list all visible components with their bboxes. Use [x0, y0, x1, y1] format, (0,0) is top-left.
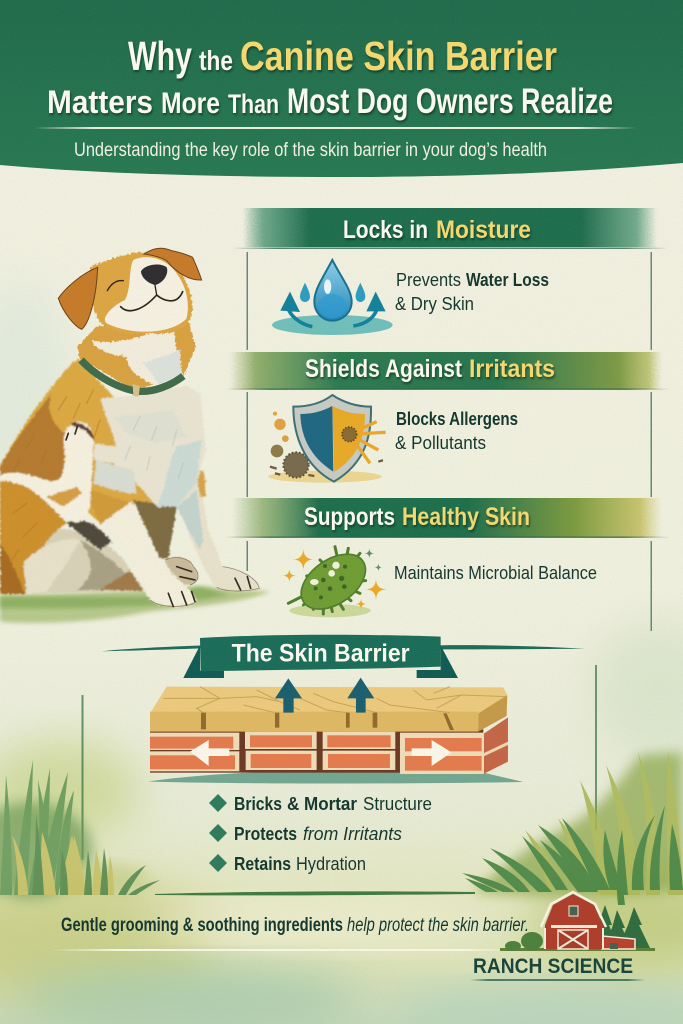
panel: the skin barrier [102, 635, 585, 874]
grass right [462, 752, 683, 905]
healthy skin text: Maintains Microbial Balance [394, 563, 597, 583]
title: Why [128, 33, 192, 79]
title: More [161, 87, 220, 120]
moisture heading band: Moisture [436, 216, 531, 244]
title [47, 33, 613, 121]
barrier bullets: Bricks [234, 794, 282, 814]
title: Matters [47, 84, 153, 120]
neck and head [77, 251, 196, 390]
shed [602, 936, 635, 949]
barrier bullets: & Mortar [287, 794, 357, 814]
barrier bullets: Protects [234, 824, 297, 844]
healthy skin heading band: Supports [304, 503, 395, 531]
arrows outward [190, 740, 452, 766]
left ear [58, 267, 98, 329]
moisture text: & Dry Skin [395, 294, 474, 314]
bricks and mortar diagram [148, 678, 523, 783]
eye patch [99, 267, 129, 298]
toes [66, 427, 251, 607]
chest [93, 385, 206, 507]
barrier bullets: Retains [234, 854, 291, 874]
barrier bullets: Structure [363, 794, 432, 814]
panel: shields against irritants [225, 344, 670, 483]
ribbon heading: The Skin Barrier [232, 640, 410, 668]
ground under dog [0, 587, 270, 623]
back and shoulder [0, 358, 177, 523]
icon: water drop with arrows [272, 260, 393, 335]
left leg [102, 502, 197, 606]
logo: Ranch Science: RANCH SCIENCE [473, 955, 633, 978]
brick layer [150, 717, 508, 774]
moisture text: Water Loss [466, 270, 549, 290]
rear paw [165, 558, 198, 585]
moisture text [395, 270, 549, 314]
stone layer [150, 687, 507, 732]
scratching leg [0, 422, 94, 522]
collar [81, 360, 183, 391]
healthy skin heading band [228, 498, 668, 538]
right ear [144, 248, 202, 280]
barrier lower rule [155, 891, 475, 895]
arrows up [275, 678, 374, 713]
tail and hind leg fur [0, 480, 67, 594]
panel: supports healthy skin [225, 490, 670, 620]
irritants heading band: Irritants [469, 355, 555, 383]
haunch [0, 529, 145, 594]
belly shade [67, 520, 112, 550]
title: Canine Skin Barrier [240, 33, 557, 79]
fur streaks [10, 390, 183, 563]
title: Than [228, 89, 279, 119]
icon: red barn [500, 892, 655, 951]
moisture text: Prevents [396, 270, 461, 290]
irritants heading band: Shields Against [305, 355, 463, 383]
subtitle: Understanding the key role of the skin barrier in your dog’s health [74, 140, 547, 161]
eye and smile [107, 281, 183, 311]
panel: locks in moisture [232, 200, 668, 335]
ribbon heading [102, 635, 585, 678]
right leg [177, 477, 259, 591]
moisture heading band [234, 208, 666, 249]
irritants text: & Pollutants [395, 433, 486, 453]
nose [141, 264, 167, 285]
header banner [0, 0, 683, 177]
barrier bullets [209, 794, 432, 874]
grass left [0, 760, 160, 898]
muzzle [105, 257, 188, 332]
barrier bullets: Hydration [296, 854, 366, 874]
faint fur edges [150, 558, 259, 606]
irritants text [395, 409, 518, 453]
irritants heading band [228, 352, 668, 390]
title: the [199, 45, 233, 76]
dog body [0, 358, 259, 606]
icon: shield [268, 395, 386, 483]
footer message: Gentle grooming & soothing ingredients [61, 915, 343, 936]
irritants text: Blocks Allergens [396, 409, 518, 429]
trees [594, 905, 650, 948]
footer message: help protect the skin barrier. [347, 915, 529, 936]
barn body [545, 894, 603, 949]
moisture heading band: Locks in [343, 216, 428, 244]
panel frame lines [82, 252, 652, 860]
icon: microbe [282, 543, 387, 620]
barrier bullets: from Irritants [303, 824, 402, 844]
bushes [505, 932, 543, 951]
healthy skin heading band: Healthy Skin [402, 503, 530, 531]
dog illustration [0, 248, 270, 623]
